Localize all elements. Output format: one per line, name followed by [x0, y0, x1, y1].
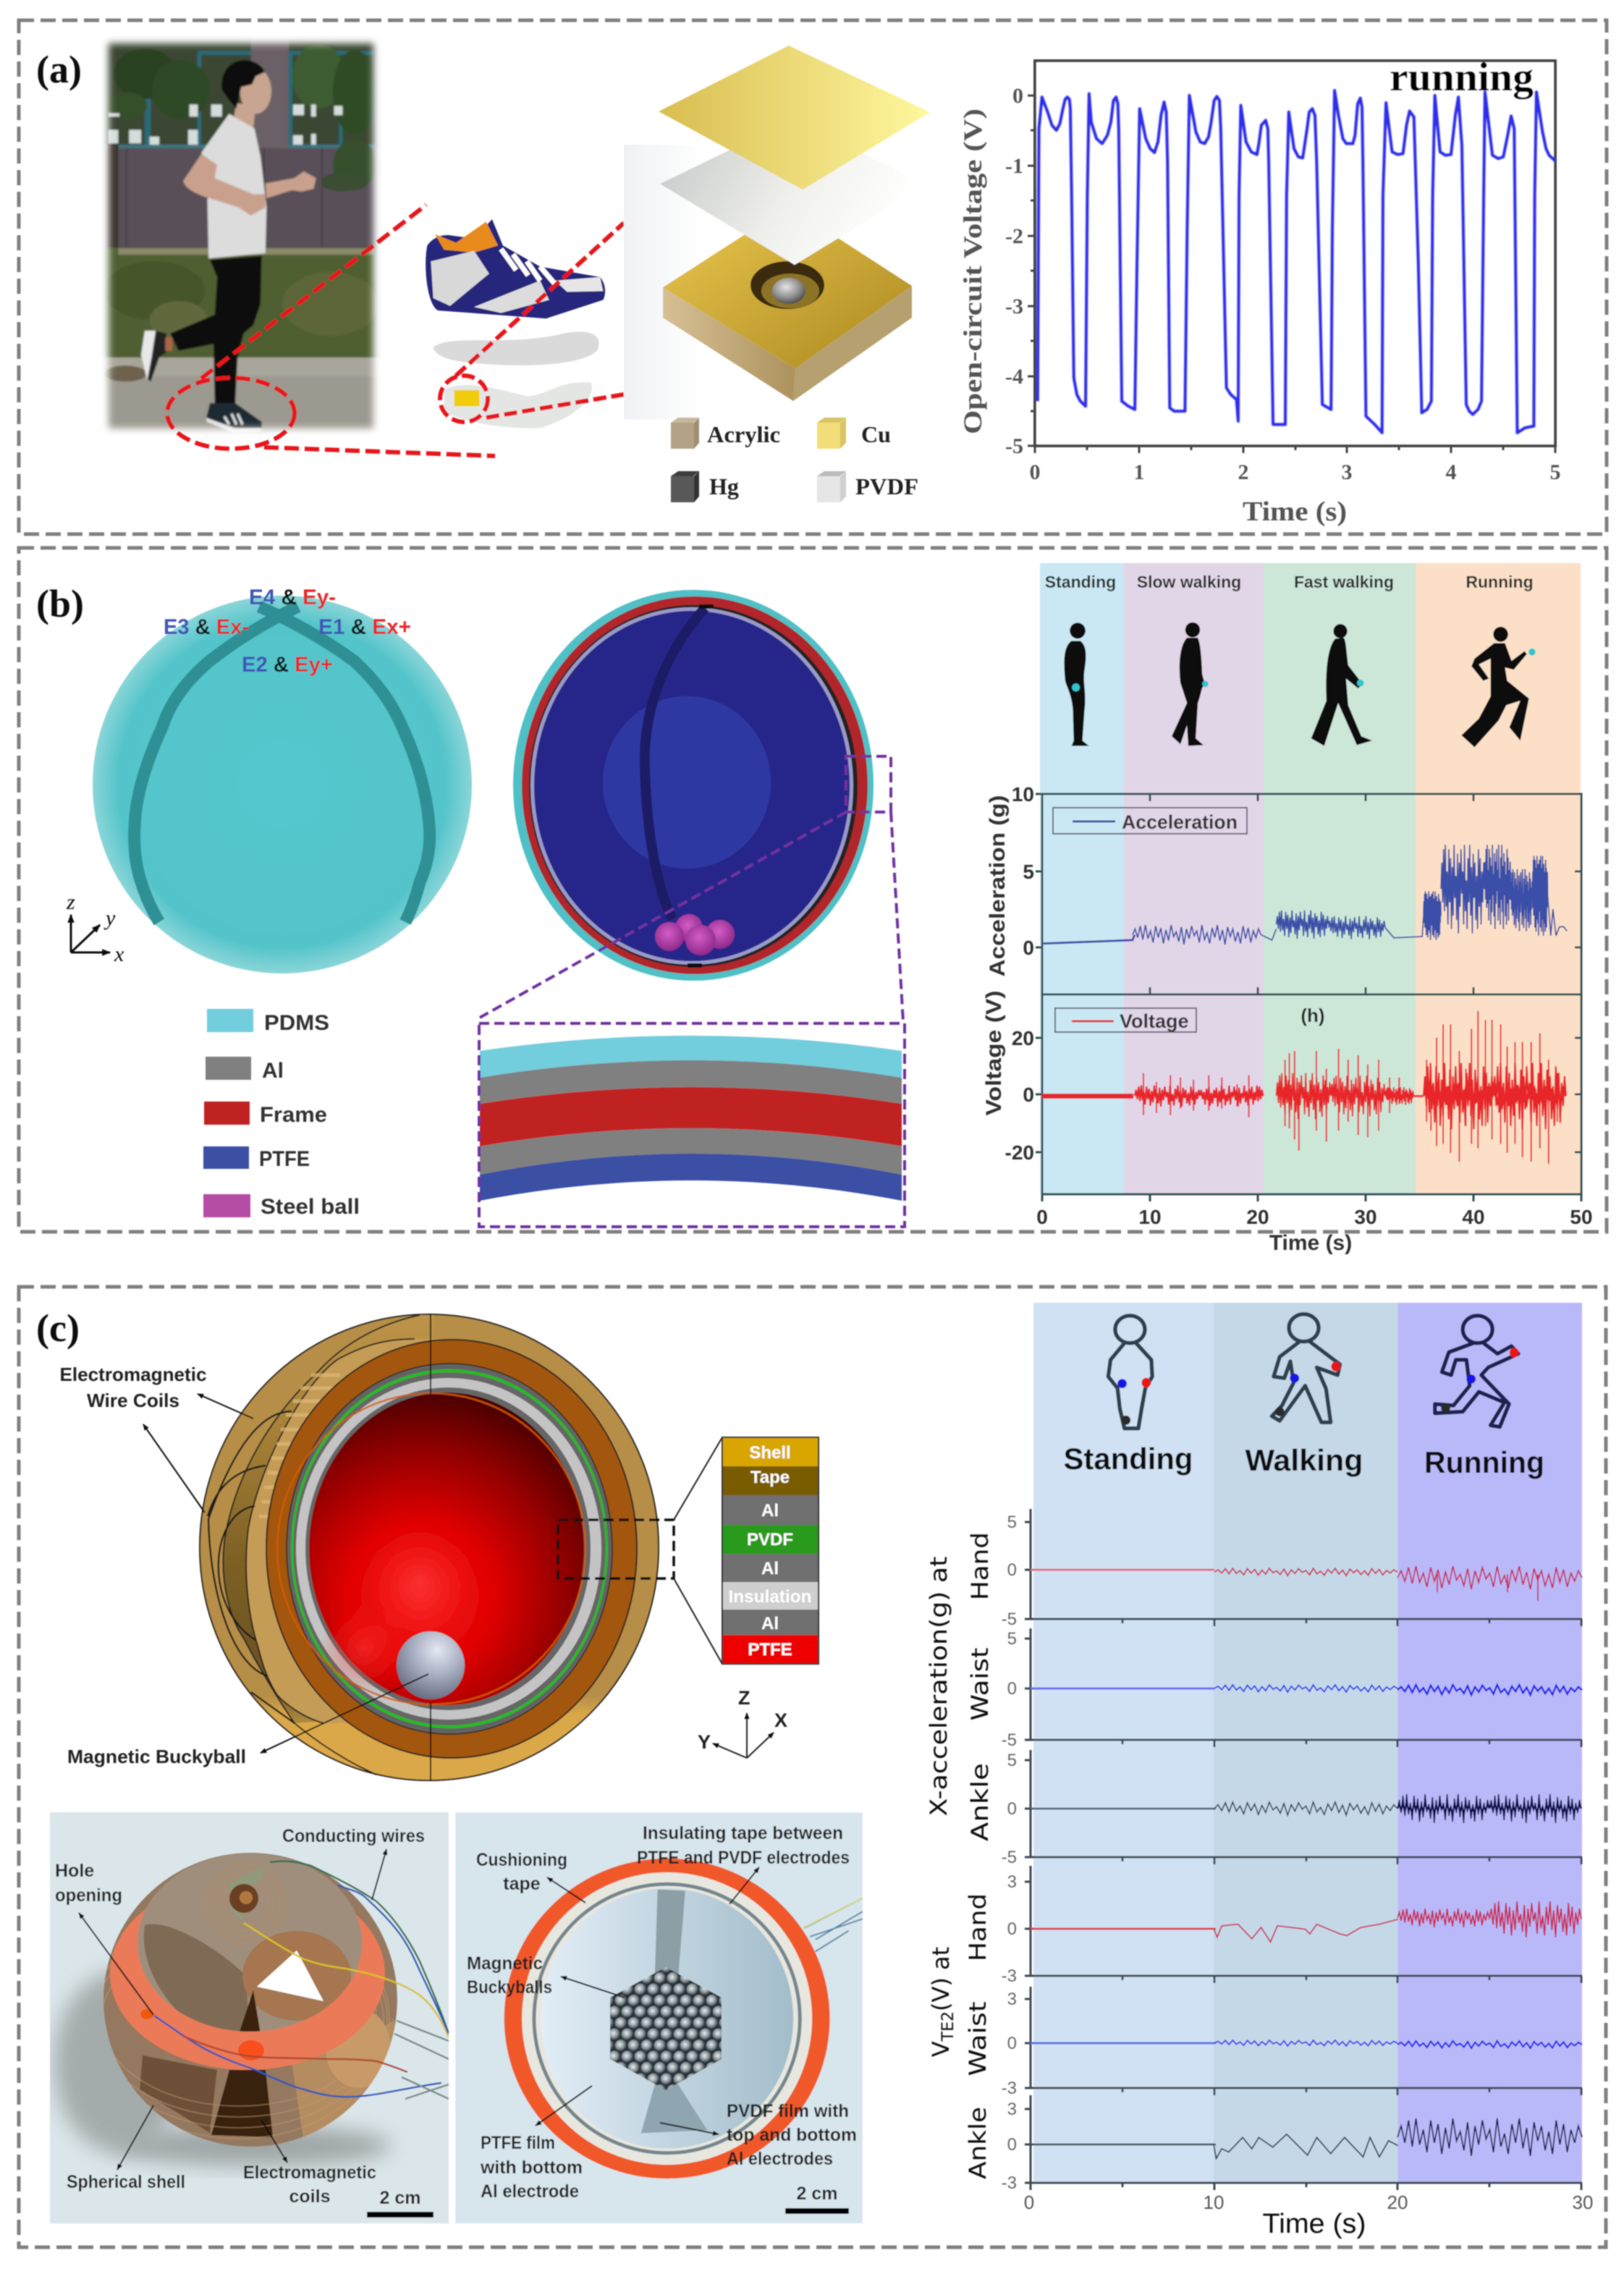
illustration: exploded layers of device [624, 46, 930, 420]
labels: right photo callouts: top and bottom [727, 2125, 857, 2145]
panel: (c) magnetic buckyball hybrid sphere [19, 1287, 1606, 2247]
y tick labels: 0 [1023, 937, 1034, 959]
y tick labels: 0 [1007, 1919, 1017, 1939]
labels: right photo callouts: Buckyballs [467, 1977, 552, 1998]
labels: right photo callouts: with bottom [480, 2157, 583, 2178]
y axis titles: (V) at [927, 1947, 955, 2011]
labels: right photo callouts: Cushioning [476, 1850, 567, 1870]
tag (h): (h) [1301, 1005, 1325, 1026]
x tick labels: 0 [1029, 460, 1041, 484]
arrows: left photo [79, 1849, 386, 2170]
activity headings: Running [1424, 1445, 1544, 1479]
labels: right photo callouts [467, 1823, 857, 2204]
y tick labels: -5 [1002, 1848, 1017, 1867]
label: magnetic buckyball: Magnetic Buckyball [67, 1746, 246, 1767]
legend: device materials: Cu [861, 421, 891, 447]
y tick labels: -1 [1005, 154, 1023, 178]
trace: hand voltage [1031, 1901, 1581, 1942]
activity headings: Standing [1064, 1442, 1193, 1476]
labels: left photo callouts: Electromagnetic [243, 2163, 376, 2183]
activity background bands [1033, 1303, 1582, 2183]
legend: device materials: Hg [709, 473, 739, 499]
x tick labels: 10 [1138, 1206, 1162, 1228]
illustration: layered sphere cutaway [200, 1314, 659, 1781]
inset: layered cross section [479, 1023, 905, 1227]
y tick labels: 3 [1007, 1990, 1017, 2009]
trace: voltage [1042, 1011, 1566, 1164]
trace: ankle voltage [1031, 2118, 1582, 2158]
labels: electrode names [164, 586, 411, 677]
labels: left photo callouts: coils [289, 2186, 330, 2207]
y tick labels: 3 [1007, 2100, 1017, 2119]
trace: hand acceleration [1031, 1566, 1582, 1601]
axes: XYZ: Y [698, 1731, 711, 1753]
y tick labels: 0 [1007, 1560, 1017, 1580]
inset: layer stack zoom: Al [761, 1559, 779, 1578]
inset: layer stack zoom: Tape [750, 1468, 790, 1487]
labels: right photo callouts: tape [503, 1874, 541, 1894]
inset: layer stack zoom: Al [761, 1614, 779, 1633]
panel label (a): (a) [36, 48, 82, 91]
y axis titles: Ankle [964, 2107, 991, 2179]
y axis titles [982, 795, 1010, 1116]
labels: left photo callouts: Conducting wires [282, 1826, 425, 1846]
y axis titles: Ankle [966, 1763, 994, 1841]
x tick labels: 20 [1246, 1206, 1269, 1228]
x axis title: Time (s) [1243, 496, 1347, 527]
y axis titles: V [927, 2041, 955, 2057]
y tick labels: 10 [1012, 783, 1034, 806]
x tick labels: 0 [1024, 2191, 1034, 2213]
y tick labels: 0 [1007, 2034, 1017, 2053]
y axis titles: TE2 [939, 2011, 957, 2042]
y tick labels: -3 [1005, 295, 1023, 318]
photo: runner outdoors [101, 36, 386, 435]
y tick labels: 5 [1007, 1751, 1017, 1770]
inset: layer stack zoom: Insulation [728, 1587, 812, 1607]
x tick labels: 30 [1573, 2191, 1593, 2213]
label: electromagnetic wire coils [59, 1364, 253, 1513]
scale bar [367, 2212, 434, 2218]
labels: electrode names: E1 & Ex+ [318, 615, 411, 639]
y axis titles: Waist [966, 1647, 994, 1721]
labels: left photo callouts: opening [55, 1885, 122, 1906]
illustration: outer sphere with electrode bands [93, 596, 472, 973]
activity background bands [1040, 563, 1581, 1194]
callout: purple zoom dashes [480, 756, 903, 1022]
y tick labels [1005, 783, 1034, 1164]
legend: device materials [671, 418, 918, 502]
axes: xyz: z [66, 890, 75, 914]
labels: left photo callouts [55, 1826, 425, 2208]
callout: red dashed zoom lines [167, 205, 495, 456]
y axis titles: Acceleration (g) [986, 795, 1010, 977]
photo: opened sphere with buckyballs [455, 1812, 863, 2223]
y tick labels: -3 [1002, 1966, 1017, 1986]
x tick labels: 30 [1354, 1206, 1377, 1228]
y tick labels [1002, 1513, 1017, 2193]
inset: layer stack zoom [558, 1437, 819, 1664]
labels: electrode names: E2 & Ey+ [242, 653, 333, 677]
labels: left photo callouts: Hole [55, 1861, 94, 1881]
labels: electrode names: E3 & Ex- [164, 615, 249, 639]
activity headings: Running [1466, 572, 1534, 591]
trace: acceleration [1042, 845, 1567, 944]
activity headings: Standing [1045, 572, 1116, 591]
x tick labels [1024, 2191, 1593, 2213]
trace: voltage waveform [1038, 90, 1556, 433]
legend: sphere materials: PTFE [259, 1147, 310, 1171]
posture outlines with sensors [1108, 1314, 1519, 1429]
axes: XYZ: Z [738, 1687, 750, 1709]
callout: second red zoom [440, 223, 624, 422]
activity headings: Fast walking [1294, 572, 1394, 591]
x tick labels [1036, 1206, 1593, 1228]
labels: right photo callouts: 2 cm [797, 2184, 837, 2204]
y axis titles: Voltage (V) [982, 990, 1006, 1116]
x axis title: Time (s) [1269, 1231, 1352, 1255]
trace: ankle acceleration [1031, 1794, 1581, 1823]
illustration: sphere cross-section with steel balls [513, 590, 874, 981]
panel: (b) spherical triboelectric device [19, 548, 1607, 1255]
y tick labels: -20 [1005, 1141, 1034, 1164]
arrows: right photo [536, 1867, 759, 2134]
labels: right photo callouts: Insulating tape between [643, 1823, 843, 1843]
y tick labels: 0 [1007, 1679, 1017, 1699]
labels: left photo callouts: Spherical shell [67, 2172, 185, 2192]
x tick labels [1029, 460, 1560, 484]
x tick labels: 1 [1133, 460, 1145, 484]
y tick labels: 20 [1012, 1027, 1034, 1049]
axes: xyz: y [103, 906, 116, 930]
y tick labels [1005, 84, 1023, 458]
x tick labels: 3 [1342, 460, 1352, 484]
photo: assembled sphere with coils [50, 1812, 449, 2223]
y axis title: Open-circuit Voltage (V) [958, 109, 987, 434]
y tick labels: 0 [1023, 1083, 1034, 1106]
x tick labels: 0 [1036, 1206, 1048, 1228]
y tick labels: -2 [1005, 224, 1023, 248]
sphere body with coil patches [88, 1849, 399, 2150]
y tick labels: -4 [1005, 365, 1023, 389]
activity headings: Slow walking [1137, 572, 1241, 591]
label: magnetic buckyball [67, 1674, 428, 1767]
legend: device materials: PVDF [855, 473, 918, 499]
legend: voltage: Voltage [1120, 1010, 1189, 1032]
activity headings [1045, 572, 1534, 591]
silhouettes: body postures with sensor dot [1064, 622, 1536, 748]
y tick labels: 5 [1023, 861, 1034, 883]
legend: sphere materials: PDMS [264, 1011, 329, 1035]
x axis title: Time (s) [1262, 2209, 1366, 2239]
legend: sphere materials: Frame [260, 1103, 327, 1127]
legend: device materials: Acrylic [707, 421, 780, 447]
activity headings [1064, 1442, 1544, 1479]
inset: layer stack zoom: PTFE [748, 1640, 792, 1660]
chart: open-circuit voltage while running [958, 55, 1560, 527]
x tick labels: 50 [1570, 1206, 1593, 1228]
trace: waist voltage [1031, 2040, 1582, 2048]
y tick labels: -5 [1002, 1610, 1017, 1629]
legend: acceleration [1053, 808, 1247, 834]
y tick labels: 0 [1007, 2135, 1017, 2155]
labels: electrode names: E4 & Ey- [249, 586, 336, 609]
x tick labels: 10 [1204, 2191, 1224, 2213]
label: electromagnetic wire coils: Electromagnetic [59, 1364, 207, 1385]
y tick labels: 0 [1007, 1799, 1017, 1819]
y axis titles: Hand [964, 1893, 991, 1961]
panel label (c): (c) [36, 1306, 80, 1350]
chart tag running: running [1390, 55, 1534, 100]
labels: right photo callouts: PTFE and PVDF electrodes [637, 1848, 850, 1868]
y axis titles: X-acceleration(g) at [925, 1556, 952, 1817]
y tick labels: 5 [1007, 1513, 1017, 1532]
labels: right photo callouts: Magnetic [467, 1953, 543, 1974]
axes [1025, 1509, 1582, 2190]
plot frames [1036, 794, 1581, 1201]
labels: right photo callouts: PTFE film [481, 2133, 555, 2153]
label: electromagnetic wire coils: Wire Coils [87, 1390, 179, 1411]
x tick labels: 40 [1462, 1206, 1485, 1228]
legend: sphere materials [203, 1009, 360, 1219]
y tick labels: -5 [1005, 434, 1023, 458]
axes: XYZ [698, 1687, 787, 1758]
labels: right photo callouts: PVDF film with [727, 2101, 849, 2121]
labels: right photo callouts: Al electrode [481, 2181, 579, 2202]
axes: xyz [66, 890, 124, 966]
y tick labels: 5 [1007, 1629, 1017, 1649]
labels: right photo callouts: Al electrodes [727, 2149, 833, 2169]
inset: layer stack zoom: PVDF [747, 1530, 793, 1550]
legend: sphere materials: Al [262, 1059, 284, 1083]
y tick labels: 0 [1012, 84, 1023, 108]
axes: XYZ: X [774, 1709, 787, 1731]
legend: sphere materials: Steel ball [261, 1195, 360, 1219]
inset: layer stack zoom: Al [761, 1501, 779, 1521]
legend: acceleration: Acceleration [1122, 811, 1238, 833]
y tick labels: -3 [1002, 2079, 1017, 2098]
axes: xyz: x [114, 942, 124, 966]
y axis titles [925, 1532, 994, 2179]
x tick labels: 2 [1238, 460, 1249, 484]
trace: waist acceleration [1031, 1685, 1582, 1695]
y tick labels: -3 [1002, 2173, 1017, 2193]
scale bar [785, 2208, 849, 2214]
illustration: exploded shoe with insole and sole [426, 219, 605, 428]
panel label (b): (b) [36, 582, 84, 625]
legend: voltage [1055, 1008, 1196, 1032]
conducting wires [154, 1861, 449, 2099]
y axis titles: Waist [964, 2002, 991, 2076]
x tick labels: 4 [1446, 460, 1456, 484]
x tick labels: 5 [1550, 460, 1560, 484]
chart: activity bands with acceleration and voltage [982, 563, 1593, 1255]
x tick labels: 20 [1387, 2191, 1408, 2213]
y tick labels: -5 [1002, 1730, 1017, 1750]
panel: (a) shoe-embedded harvester [19, 20, 1607, 534]
y tick labels: 3 [1007, 1872, 1017, 1892]
inset: layer stack zoom: Shell [749, 1443, 791, 1463]
activity headings: Walking [1245, 1443, 1363, 1477]
chart: acceleration and voltage at hand, waist, ankle [925, 1303, 1593, 2239]
labels: left photo callouts: 2 cm [380, 2188, 420, 2208]
y axis titles: Hand [966, 1532, 994, 1600]
